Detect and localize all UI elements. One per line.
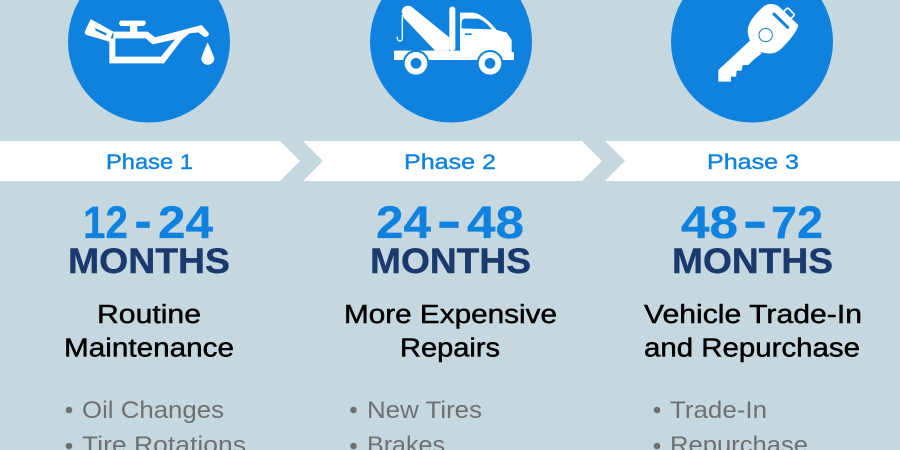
list: phase 1 items: Oil Changes [82,397,224,424]
duration: 48-72 months: 48 [681,197,738,248]
duration: 24-48 months: 24 [376,197,431,248]
duration: 24-48 months [370,196,531,281]
panel: phase 1 column [0,0,300,450]
duration: 12-24 months: – [136,196,150,247]
phase 2 ribbon: Phase 2 [404,150,496,174]
duration: 12-24 months [68,196,230,281]
duration: 48-72 months: MONTHS [672,241,833,281]
heading: vehicle trade-in and repurchase [644,301,862,362]
phase 3 ribbon [605,141,900,181]
phase 1 ribbon [0,141,300,181]
heading: routine maintenance [64,301,234,362]
heading: routine maintenance: Routine [97,301,201,329]
duration: 48-72 months [672,196,833,281]
panel: phase 2 column [303,0,602,450]
duration: 48-72 months: 72 [771,197,823,248]
duration: 12-24 months: 24 [158,197,213,248]
duration: 48-72 months: – [745,196,765,247]
list: phase 3 items [654,397,808,450]
heading: routine maintenance: Maintenance [64,334,234,362]
phase 1 ribbon: Phase 1 [106,150,193,174]
duration: 12-24 months: 12 [83,197,128,248]
list: phase 2 items [350,397,482,450]
duration: 12-24 months: MONTHS [68,241,230,281]
phase 2 ribbon [303,141,602,181]
list: phase 1 items [66,397,246,450]
heading: vehicle trade-in and repurchase: and Repurchase [644,334,860,362]
list: phase 3 items: Trade-In [670,397,767,424]
panel: phase 3 column [605,0,900,450]
heading: more expensive repairs [344,301,557,362]
duration: 24-48 months: MONTHS [370,241,531,281]
icon: tow truck [370,0,532,122]
duration: 24-48 months: – [439,196,459,247]
list: phase 2 items: New Tires [367,397,482,424]
duration: 24-48 months: 48 [467,197,524,248]
icon: car key [671,0,833,122]
icon: oil can [68,0,230,122]
heading: vehicle trade-in and repurchase: Vehicle Trade-In [644,301,862,329]
phase 3 ribbon: Phase 3 [707,150,799,174]
heading: more expensive repairs: More Expensive [344,301,557,329]
heading: more expensive repairs: Repairs [400,334,500,362]
